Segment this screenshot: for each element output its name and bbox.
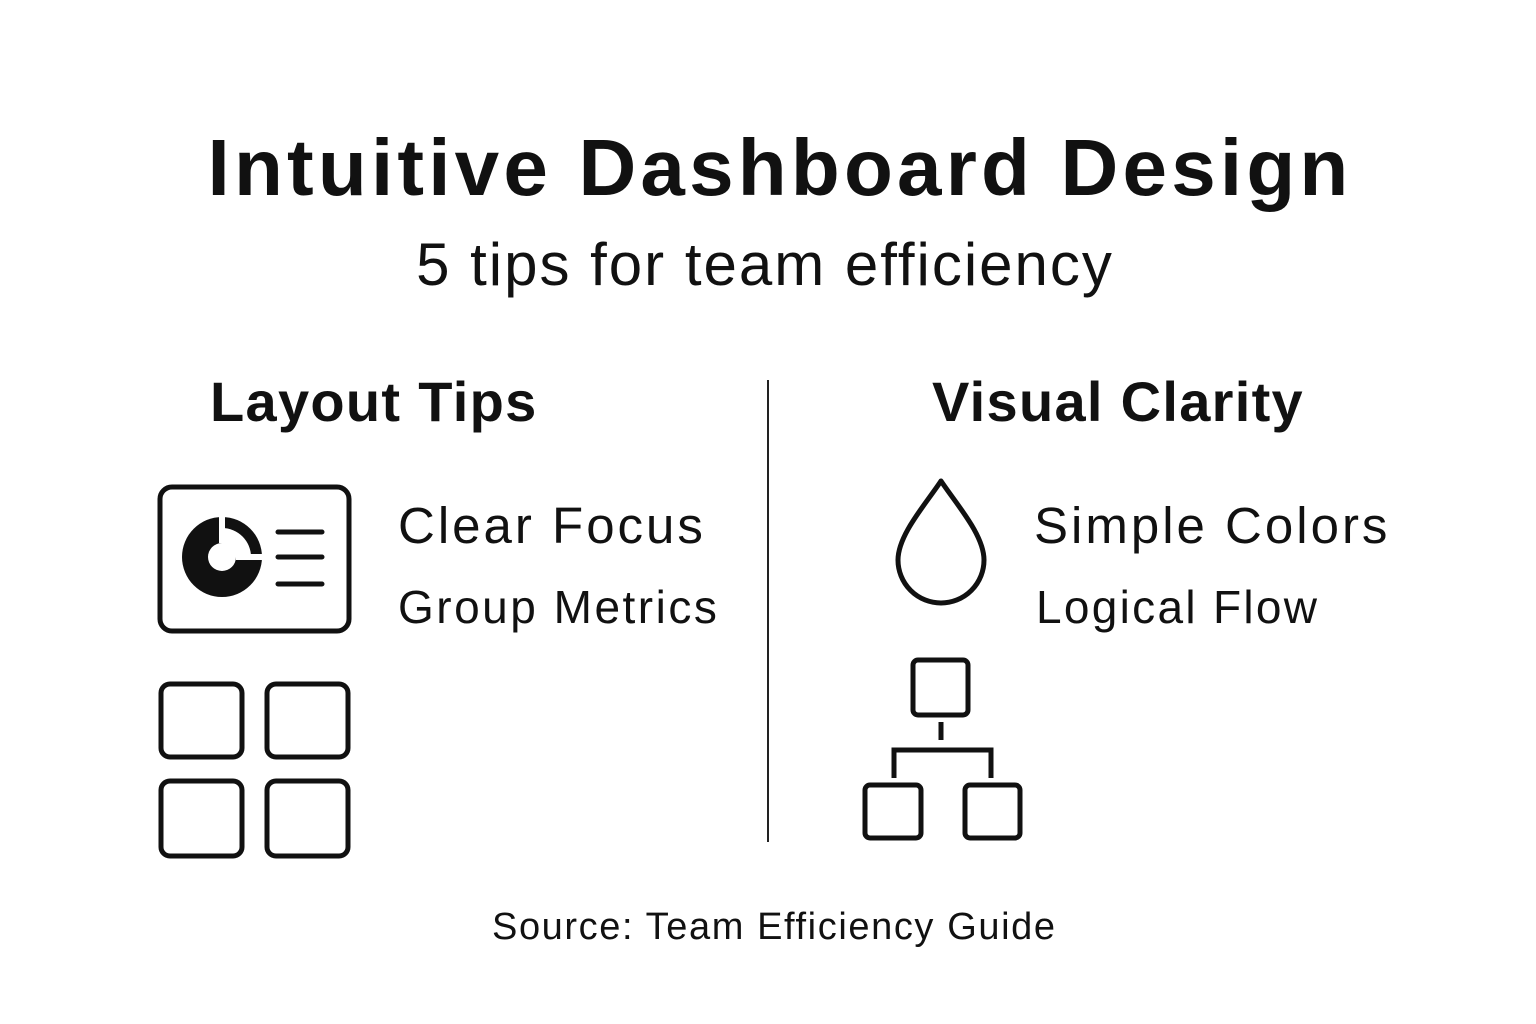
divider xyxy=(767,380,769,842)
heading: Layout Tips: Layout Tips xyxy=(210,370,538,433)
text: Group Metrics: Group Metrics xyxy=(398,581,719,633)
text: Logical Flow: Logical Flow xyxy=(1036,581,1319,633)
subtitle: 5 tips for team efficiency xyxy=(416,231,1114,298)
text: Clear Focus: Clear Focus xyxy=(398,497,706,554)
text: Simple Colors: Simple Colors xyxy=(1034,497,1390,554)
source: Source: Team Efficiency Guide xyxy=(492,906,1057,948)
heading: Visual Clarity: Visual Clarity xyxy=(932,370,1304,433)
title: Intuitive Dashboard Design xyxy=(208,123,1352,212)
